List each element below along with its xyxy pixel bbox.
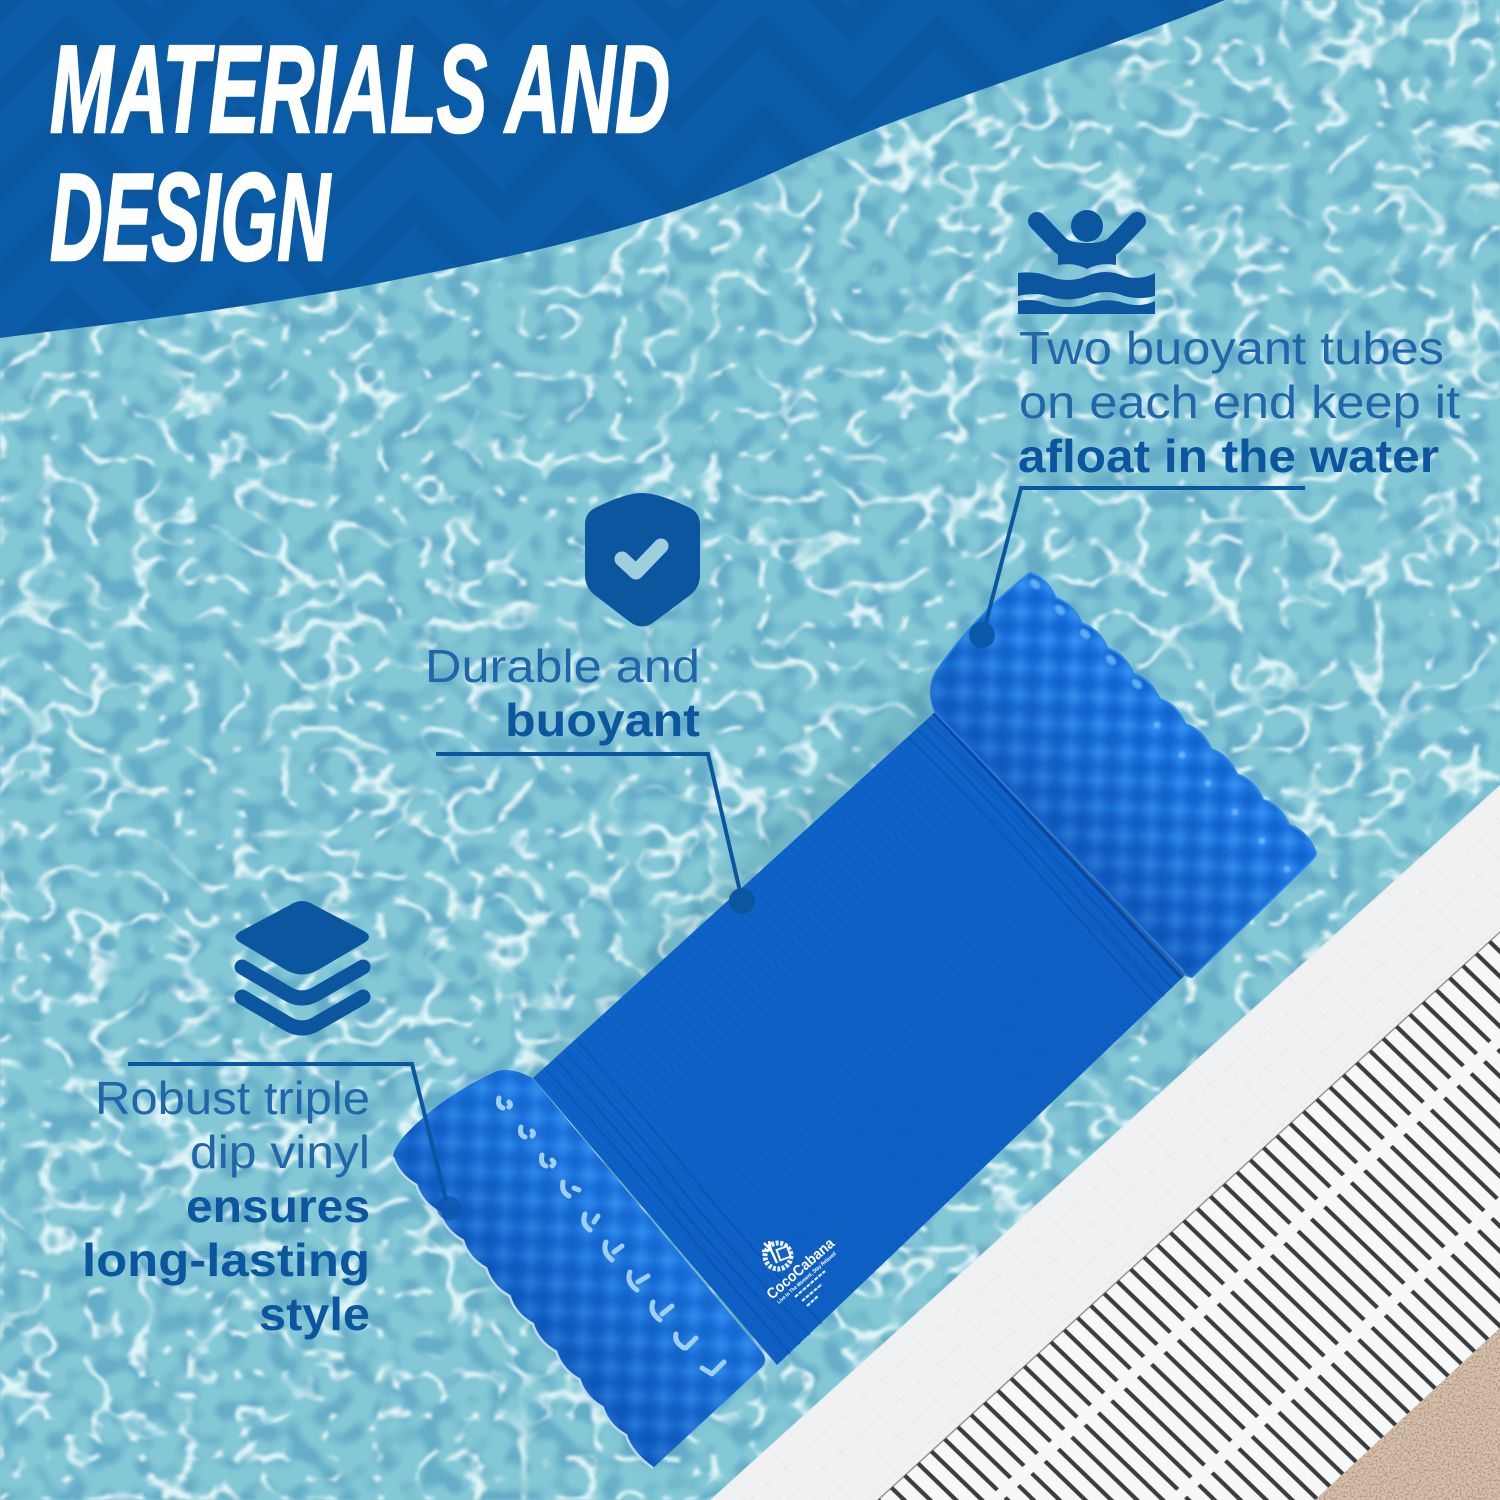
left tube (393, 1070, 765, 1468)
float shadow (395, 573, 1315, 1468)
coping tiles (710, 785, 1500, 1500)
text: vinyl (95, 1072, 370, 1178)
callout: buoyant tubes: afloat in the water (1018, 430, 1439, 482)
title: DESIGN (50, 149, 331, 287)
icon: shield with check (585, 493, 700, 626)
callout: triple dip vinyl: ensures (186, 1180, 370, 1232)
pool edge: coping, grate and sand (710, 785, 1500, 1500)
icon: swimmer in waves (1018, 210, 1155, 314)
product: water hammock float (393, 573, 1316, 1468)
logo tagline: Live In The Moment, Stay Relaxed (776, 1251, 838, 1306)
text: tubes: on each end keep it (1019, 376, 1460, 428)
icon: stacked layers (236, 901, 369, 1028)
drainage grate (878, 932, 1500, 1500)
callout: triple dip vinyl: style (259, 1288, 370, 1340)
callout: durable: buoyant (505, 694, 700, 746)
sand deck (1315, 1328, 1500, 1500)
water reflections on tube (498, 1098, 724, 1374)
brand logo on hammock (762, 1235, 838, 1306)
text: tubes (1019, 322, 1460, 428)
callout: buoyant tubes (969, 210, 1460, 648)
logo wordmark: CocoCabana (763, 1235, 838, 1303)
header banner (0, 0, 1225, 338)
callout: triple dip vinyl: long-lasting (82, 1234, 370, 1286)
mesh hammock (533, 712, 1183, 1365)
title: MATERIALS AND (50, 21, 670, 159)
logo emblem (762, 1241, 791, 1269)
callout: triple dip vinyl (82, 901, 461, 1340)
text: vinyl: Robust triple (95, 1072, 370, 1124)
text: tubes: Two buoyant tubes (1019, 322, 1444, 374)
text: vinyl: dip vinyl (190, 1126, 370, 1178)
title (50, 21, 670, 287)
leader line (969, 488, 1305, 648)
leader line (436, 754, 755, 914)
text: durable: Durable and (425, 640, 700, 692)
callout: durable (425, 493, 755, 914)
leader line (128, 1064, 461, 1220)
right tube (931, 573, 1316, 977)
edge highlights (1028, 577, 1290, 872)
